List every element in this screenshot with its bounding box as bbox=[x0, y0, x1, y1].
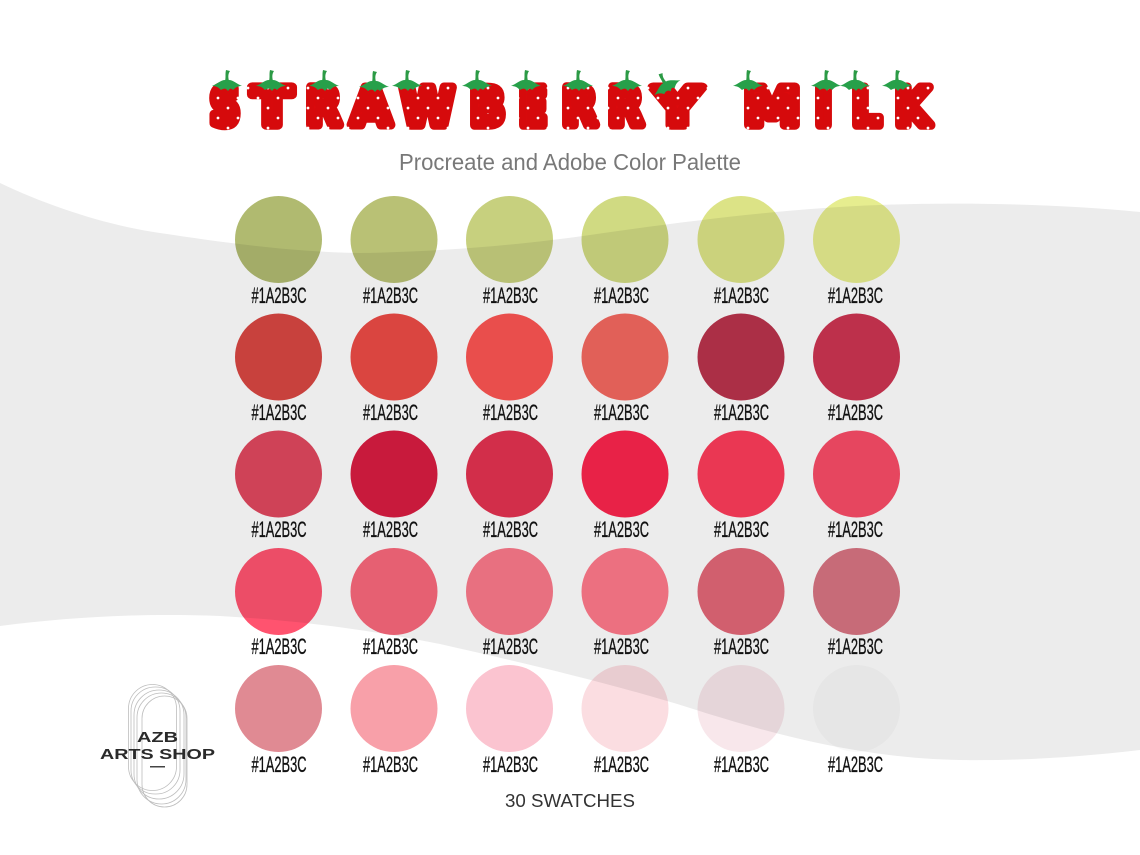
swatch 4-2: #1A2B3C bbox=[363, 634, 418, 659]
swatch 3-5 bbox=[698, 430, 784, 542]
swatch row 2 bbox=[235, 314, 900, 425]
swatch row 5 bbox=[235, 665, 900, 777]
swatch 5-3: #1A2B3C bbox=[483, 752, 538, 777]
swatch 1-5: #1A2B3C bbox=[714, 283, 769, 308]
swatch 3-3: #1A2B3C bbox=[483, 517, 538, 542]
title: Strawberry Milk: M bbox=[744, 78, 800, 138]
swatch 5-4: #1A2B3C bbox=[594, 752, 649, 777]
swatch row 3 bbox=[235, 430, 900, 542]
swatch 3-6: #1A2B3C bbox=[828, 517, 883, 542]
swatch 5-6: #1A2B3C bbox=[828, 752, 883, 777]
title: Strawberry Milk: E bbox=[519, 78, 547, 138]
swatch 5-3 bbox=[466, 665, 553, 777]
swatch 3-4 bbox=[582, 430, 668, 542]
swatch 3-6 bbox=[813, 430, 900, 542]
background wave band bbox=[0, 183, 1140, 760]
logo: AZB Arts Shop: ARTS SHOP bbox=[100, 746, 215, 763]
swatch 4-4: #1A2B3C bbox=[594, 634, 649, 659]
swatch 1-3: #1A2B3C bbox=[483, 283, 538, 308]
title: Strawberry Milk bbox=[204, 66, 936, 138]
swatch 4-2 bbox=[350, 548, 438, 659]
swatch 5-4 bbox=[582, 665, 668, 777]
swatch 3-5: #1A2B3C bbox=[714, 517, 769, 542]
swatch 1-1: #1A2B3C bbox=[252, 283, 307, 308]
swatch 5-2 bbox=[350, 665, 438, 777]
subtitle: Procreate and Adobe Color Palette bbox=[399, 149, 741, 175]
logo: AZB Arts Shop bbox=[100, 684, 215, 807]
swatch 3-1: #1A2B3C bbox=[252, 517, 307, 542]
swatch 5-5: #1A2B3C bbox=[714, 752, 769, 777]
swatch 1-6 bbox=[813, 196, 900, 308]
title: Strawberry Milk: T bbox=[252, 78, 293, 138]
title: Strawberry Milk: B bbox=[470, 78, 505, 138]
swatch 1-2 bbox=[350, 196, 438, 308]
swatch 1-5 bbox=[698, 196, 784, 308]
swatch row 4 bbox=[235, 548, 900, 659]
swatch 3-1 bbox=[235, 430, 322, 542]
swatch 2-4 bbox=[582, 314, 668, 425]
title: Strawberry Milk: L bbox=[852, 78, 881, 138]
swatch 2-3: #1A2B3C bbox=[483, 400, 538, 425]
swatch 4-6 bbox=[813, 548, 900, 659]
title: Strawberry Milk: R bbox=[306, 78, 341, 138]
swatch 4-3 bbox=[466, 548, 553, 659]
logo: AZB Arts Shop: AZB bbox=[137, 729, 178, 746]
title: Strawberry Milk: S bbox=[210, 78, 240, 138]
swatch 4-6: #1A2B3C bbox=[828, 634, 883, 659]
swatch 2-2 bbox=[350, 314, 438, 425]
swatch 2-1: #1A2B3C bbox=[252, 400, 307, 425]
swatch 4-4 bbox=[582, 548, 668, 659]
swatch 2-5 bbox=[698, 314, 784, 425]
swatch 5-1 bbox=[235, 665, 322, 777]
swatch 5-2: #1A2B3C bbox=[363, 752, 418, 777]
swatch 1-6: #1A2B3C bbox=[828, 283, 883, 308]
swatch 4-1: #1A2B3C bbox=[252, 634, 307, 659]
swatch 1-4: #1A2B3C bbox=[594, 283, 649, 308]
swatch 1-2: #1A2B3C bbox=[363, 283, 418, 308]
swatch 4-5 bbox=[698, 548, 784, 659]
swatch 2-3 bbox=[466, 314, 553, 425]
swatch 2-5: #1A2B3C bbox=[714, 400, 769, 425]
swatch 1-3 bbox=[466, 196, 553, 308]
title: Strawberry Milk: A bbox=[351, 78, 391, 138]
swatch 5-1: #1A2B3C bbox=[252, 752, 307, 777]
swatch 2-1 bbox=[235, 314, 322, 425]
title: Strawberry Milk: Y bbox=[653, 78, 703, 138]
swatch 2-6 bbox=[813, 314, 900, 425]
swatch 2-4: #1A2B3C bbox=[594, 400, 649, 425]
swatch 3-2 bbox=[350, 430, 438, 542]
title: Strawberry Milk: W bbox=[401, 78, 454, 138]
title: Strawberry Milk: R bbox=[562, 78, 597, 138]
swatch 1-1 bbox=[235, 196, 322, 308]
title: Strawberry Milk: K bbox=[895, 78, 931, 138]
swatch 3-4: #1A2B3C bbox=[594, 517, 649, 542]
swatch 2-6: #1A2B3C bbox=[828, 400, 883, 425]
footer: swatch count: 30 SWATCHES bbox=[505, 791, 635, 811]
swatch 4-5: #1A2B3C bbox=[714, 634, 769, 659]
swatch 3-2: #1A2B3C bbox=[363, 517, 418, 542]
title: Strawberry Milk: I bbox=[815, 78, 832, 138]
swatch 1-4 bbox=[582, 196, 668, 308]
swatch 5-5 bbox=[698, 665, 784, 777]
swatch 3-3 bbox=[466, 430, 553, 542]
swatch 5-6 bbox=[813, 665, 900, 777]
swatch row 1 bbox=[235, 196, 900, 308]
swatch 4-1 bbox=[235, 548, 322, 659]
swatch 4-3: #1A2B3C bbox=[483, 634, 538, 659]
title: Strawberry Milk: R bbox=[608, 78, 643, 138]
swatch 2-2: #1A2B3C bbox=[363, 400, 418, 425]
